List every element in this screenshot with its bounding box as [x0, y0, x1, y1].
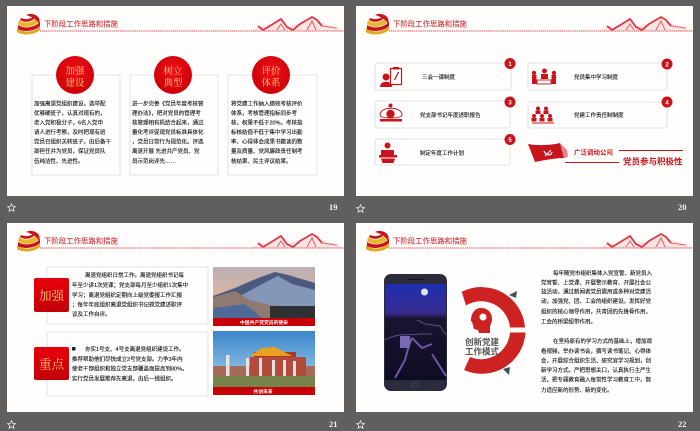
phone with night photo	[384, 274, 447, 391]
heading: slide 21: 下阶段工作思路和措施	[44, 236, 119, 246]
card: 树立典型: 典型	[163, 77, 183, 89]
text block: slide 22: 党宣誓、上党课、开展警示教育、开展社会公	[541, 278, 652, 286]
card: 评价体系: 将党建工作纳入绩效考核评价	[231, 100, 303, 108]
text block: slide 22: 动，加强党、团、工会的组织建设。发挥好党	[541, 297, 652, 305]
header: slide 19 emblem and great wall art	[17, 14, 344, 34]
card: 加强建设: 伍纯洁性、先进性。	[34, 157, 84, 165]
card: 评价体系: 核结果、民主评议结果。	[231, 157, 292, 165]
page footer: slide 19: 19	[329, 202, 338, 212]
ring diagram: 创新党建工作模式	[462, 287, 526, 375]
photo: great wall with caption: 中国共产党党员的使命	[240, 319, 288, 326]
item 1: 三会一课制度: 1	[508, 62, 512, 68]
card: 加强建设: 请人进行考察，及时把现有班	[34, 128, 106, 136]
text block: slide 22: 在坚持原有的学习方式的基础上，增加观	[553, 337, 653, 345]
card: 加强建设: 部担任并为党员，保证党员队	[34, 147, 106, 155]
panel: slide 19	[7, 6, 344, 196]
card: 评价体系: 标核结值不低于集中学习出勤	[231, 128, 303, 136]
header: slide 21 emblem and great wall art	[17, 231, 344, 251]
text block: slide 22: 组织的核心领导作用，共青团的先锋骨作用，	[541, 308, 651, 316]
item 2: 党员集中学习制度	[528, 58, 672, 90]
card: 评价体系	[228, 56, 317, 175]
page footer: slide 20: 20	[678, 202, 686, 212]
card: 加强建设	[32, 56, 120, 175]
card: 评价体系: 核，权重不低于20%，考核指	[231, 118, 303, 126]
header: slide 22 emblem and great wall art	[366, 231, 693, 251]
block: 加强: ；每年年底组织离退党组织书记抓党建述职评	[72, 300, 183, 308]
item 4: 党建工作责任制制度	[528, 96, 672, 128]
arrow: lower	[503, 367, 510, 375]
item 5: 制定年度工作计划: 制定年度工作计划	[420, 149, 464, 157]
block: 重点: 使老干部组织和独立党支部覆盖面提高到80%。	[72, 364, 188, 372]
block: 重点	[34, 332, 208, 396]
card: 评价体系: 体系	[261, 77, 281, 89]
page footer: slide 22: 22	[678, 419, 686, 429]
callout: 广泛调动公司党员参与积极性	[528, 143, 683, 166]
block: 加强: 议及工作自评。	[72, 310, 111, 318]
card: 树立典型: ，党员日常行为规范化。评选	[132, 138, 204, 146]
text block: slide 22: 活，把专题教育融入每常性学习教育工中，努	[541, 376, 652, 384]
item 3: 党支部书记年度述职报告: 党支部书记年度述职报告	[420, 111, 481, 119]
item 5: 制定年度工作计划	[375, 134, 516, 165]
block: 加强: 加强	[39, 288, 64, 303]
card: 树立典型: 离退开展 先进共产党员、党	[132, 147, 200, 155]
photo: tiananmen with caption: 共创未来	[253, 388, 273, 395]
block: 加强	[34, 267, 208, 324]
item 1: 三会一课制度: 三会一课制度	[422, 73, 456, 81]
text block: slide 22: 看视频，举办读书会，撰写读书笔记、心得体	[541, 347, 652, 355]
heading: slide 19: 下阶段工作思路和措施	[44, 20, 119, 28]
card: 加强建设: 党员召组织关转班子，由后备干	[34, 138, 112, 146]
card: 树立典型: 进一步完善《党员年度考核管	[132, 100, 204, 108]
item 1: 三会一课制度	[375, 58, 516, 90]
heading: slide 20: 下阶段工作思路和措施	[393, 20, 468, 28]
item 2: 党员集中学习制度: 党员集中学习制度	[574, 73, 619, 81]
page footer: slide 21: 21	[329, 419, 338, 429]
card: 评价体系: 评价	[261, 65, 281, 77]
text block: slide 22: 工会的桥梁纽带作用。	[541, 318, 596, 326]
card: 树立典型: 树立	[163, 65, 183, 77]
card: 树立典型: 核管理相有机结合起来，通过	[132, 118, 204, 126]
card: 加强建设: 建设	[65, 77, 85, 89]
block: 重点: 夯实1号支、4号支离退党组织建设工作。	[85, 345, 185, 353]
block: 加强: 学习；离退党组织定期向上级党委报工作汇报	[72, 291, 183, 299]
block: 重点: 推荐帮助他们尽快成立2号党支部。力争3年内	[72, 355, 183, 363]
panel: slide 20	[356, 6, 693, 196]
heading: slide 22: 下阶段工作思路和措施	[393, 236, 468, 246]
text block: slide 22: 每年随党市组织集体入党宣誓、新党员入	[553, 269, 653, 277]
photo: tiananmen with caption	[213, 331, 315, 395]
header: slide 20 emblem and great wall art	[366, 14, 693, 34]
text block: slide 22: 会，开展综合组织生活、研究宜学习规划，创	[541, 356, 651, 364]
text block: slide 22: 益活动，通过新闻者党员需用或多种对党建活	[541, 288, 652, 296]
page footer: slide 22	[357, 419, 686, 429]
card: 树立典型: 理办法》，把对党员的管理考	[132, 109, 201, 117]
block: 加强: 离退党组织日常工作。离退党组织书记每	[85, 271, 185, 279]
card: 评价体系: 体系，考核管理指标同步考	[231, 109, 298, 117]
arrow: upper	[509, 291, 517, 298]
card: 树立典型	[130, 56, 218, 175]
ring diagram: 创新党建工作模式: 创新党建	[465, 337, 499, 347]
item 5: 制定年度工作计划: 5	[508, 138, 512, 144]
item 3: 党支部书记年度述职报告	[375, 96, 516, 128]
text block: slide 22	[541, 269, 653, 394]
panel: slide 22	[356, 223, 693, 412]
block: 加强: 年至少讲1次党课；党支部每月至少组织1次集中	[72, 281, 188, 289]
page footer: slide 20	[357, 202, 686, 212]
callout: 广泛调动公司党员参与积极性: 党员参与积极性	[623, 156, 683, 166]
icon: head with lightbulb	[471, 308, 492, 333]
item 2: 党员集中学习制度: 2	[665, 62, 669, 68]
card: 树立典型: 员示范岗评先……	[132, 157, 176, 165]
photo: great wall with caption	[213, 267, 315, 326]
page footer: slide 21	[8, 419, 338, 429]
card: 评价体系: 率、心得体会成果书籍读的数	[231, 138, 303, 146]
block: 重点: 重点	[39, 356, 64, 372]
card: 树立典型: 量化考评促现党员标准具体化	[132, 128, 204, 136]
card: 评价体系: 量及质量、党风廉政责任制考	[231, 147, 303, 155]
item 4: 党建工作责任制制度: 4	[665, 100, 669, 106]
item 4: 党建工作责任制制度: 党建工作责任制制度	[574, 111, 624, 119]
page footer: slide 19	[8, 202, 338, 212]
text block: slide 22: 力适应新的形势、新的变化。	[541, 386, 613, 394]
panel: slide 21	[7, 223, 344, 412]
item 3: 党支部书记年度述职报告: 3	[508, 100, 512, 106]
text block: slide 22: 新学习方式。严把思想关口，认真执行主严生	[541, 366, 652, 374]
block: 重点: 实行党员发展推荐先离退，由后一线组织。	[72, 374, 177, 382]
ring diagram: 创新党建工作模式: 工作模式	[465, 346, 499, 356]
card: 加强建设: 加强离退党组织建设，选举配	[34, 100, 106, 108]
callout: 广泛调动公司党员参与积极性: 广泛调动公司	[574, 148, 613, 156]
card: 加强建设: 加强	[65, 65, 85, 77]
card: 加强建设: 老入党积极分子，6名入党申	[34, 118, 103, 126]
card: 加强建设: 优够硬班子，认真对现有的，	[34, 109, 106, 117]
